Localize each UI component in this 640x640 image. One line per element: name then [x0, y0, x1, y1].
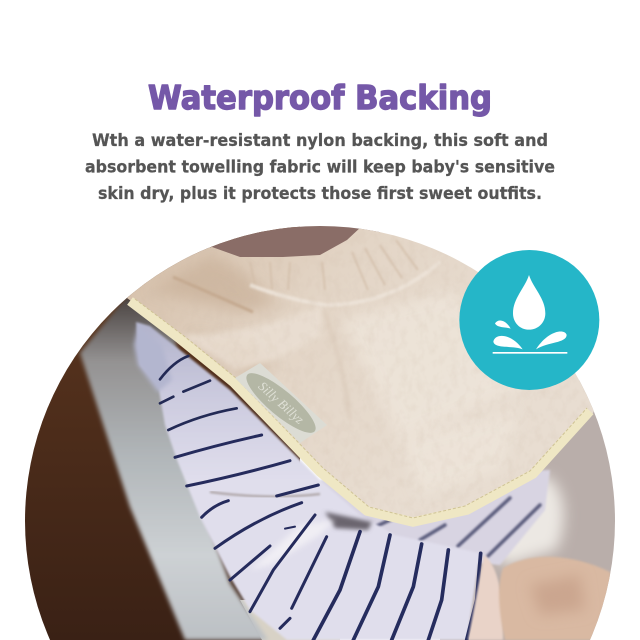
collar ribs: [250, 240, 418, 290]
darker collar and shoulder shading: [161, 256, 276, 374]
title: Waterproof Backing: [148, 78, 492, 117]
icon: water drop: [513, 275, 545, 330]
badge: waterproof icon: [459, 250, 599, 390]
sleeve stripes, navy: [353, 535, 481, 640]
label text: Silly Billyz: [256, 378, 307, 427]
shirt body: [136, 322, 480, 640]
towelling highlights: [346, 296, 494, 470]
label oval: [246, 373, 316, 433]
blurred back shirt stripes: [377, 498, 540, 556]
shirt back: [320, 470, 550, 565]
shirt dark fold near bib: [325, 512, 372, 530]
skin above collar: [190, 226, 380, 257]
hand shading: [530, 575, 585, 615]
upper shirt stripes: [160, 356, 237, 430]
floor patch under shirt: [240, 600, 340, 640]
binding stitching: [135, 299, 587, 518]
right wall: [440, 380, 615, 640]
bib binding: [130, 301, 590, 522]
bib: [127, 228, 594, 527]
icon: splash drops: [493, 321, 567, 349]
description text: Wth a water-resistant nylon backing, this soft and: [92, 131, 548, 151]
shirt collar lump: [134, 325, 172, 392]
baby hand: [499, 557, 625, 640]
photo background: brown wall: [0, 220, 300, 640]
white chair back: [498, 473, 570, 568]
teal circle: [459, 250, 599, 390]
collar seam shadow: [173, 277, 253, 312]
shirt stripes, navy: [175, 435, 360, 640]
collar seam highlight: [250, 262, 440, 305]
baby arm: [468, 555, 503, 640]
towelling details: [158, 240, 544, 470]
shirt highlight fold: [250, 520, 335, 570]
shirt fold shadow: [210, 492, 320, 497]
icon: water surface line: [493, 352, 567, 354]
shoulder fold: [186, 310, 320, 370]
centre crease: [346, 398, 350, 416]
bib fabric: [127, 228, 594, 517]
circular photo of baby wearing bib: [25, 226, 615, 640]
woven label: [235, 363, 327, 443]
description text: skin dry, plus it protects those first sweet outfits.: [98, 184, 542, 204]
description text: [85, 131, 555, 204]
terry noise texture: [312, 302, 544, 441]
description text: absorbent towelling fabric will keep baby's sensitive: [85, 158, 555, 178]
high chair arm: [80, 296, 268, 640]
label tab: [235, 363, 327, 443]
